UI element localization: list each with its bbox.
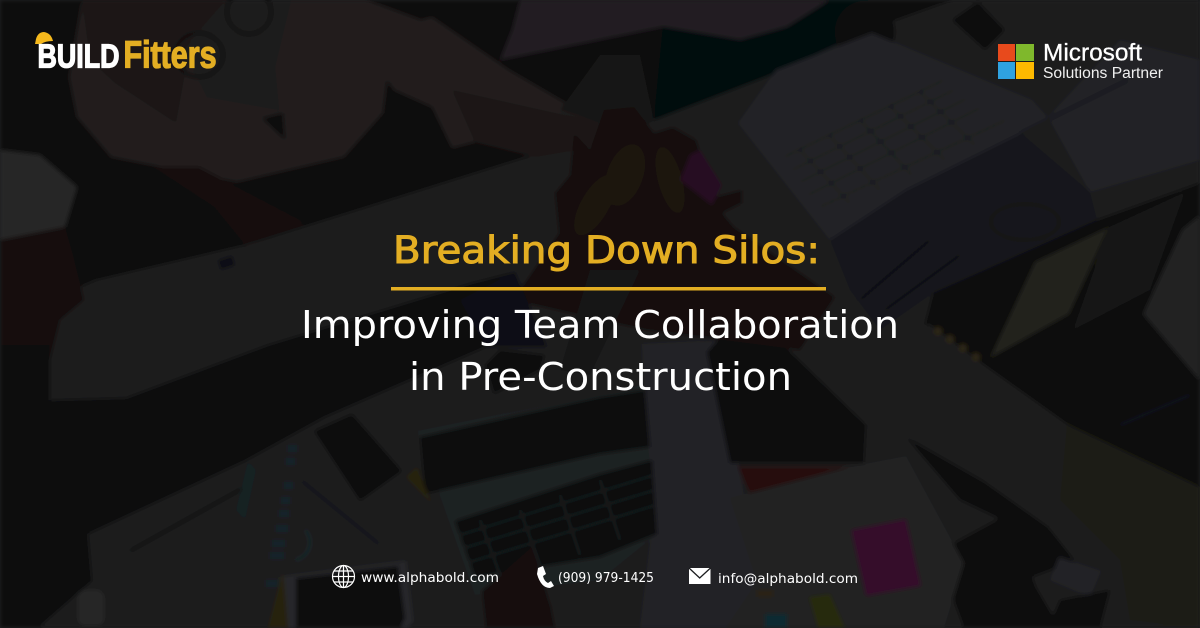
icon: phone [537, 566, 554, 588]
man hair [0, 150, 77, 240]
sleeve buttons [934, 327, 980, 361]
laptop black [925, 183, 1200, 487]
logo word Fitters: Fitters [124, 34, 216, 76]
logo: BuildFitters [35, 32, 216, 76]
bottom phone [279, 561, 413, 628]
phone number: (909) 979-1425 [558, 570, 654, 586]
woman forearm [452, 90, 600, 157]
dark shadow zone under paper [830, 133, 1097, 330]
watch [78, 590, 104, 626]
laptop [417, 385, 657, 595]
pink note [851, 519, 921, 596]
pen and right paper [1048, 40, 1200, 192]
woman shirt [69, 0, 600, 182]
heading: Breaking Down Silos: [393, 228, 820, 272]
desk pens [860, 240, 930, 300]
hands stack [513, 107, 835, 350]
paper seam [245, 245, 262, 320]
tablet [707, 310, 866, 463]
title block [301, 228, 899, 400]
glasses [227, 0, 271, 34]
second person shirt [500, 0, 830, 60]
pink note top [680, 150, 722, 205]
sheet [726, 456, 964, 628]
blue arm [0, 272, 547, 628]
logo: Microsoft Solutions Partner [998, 40, 1163, 82]
keyboard strip over arm [560, 270, 640, 375]
contact bar [332, 566, 858, 588]
chart ruler [266, 445, 297, 587]
collar shadow [262, 113, 285, 140]
phone mid [314, 414, 402, 501]
hand on laptop [482, 547, 555, 628]
woman face [184, 0, 291, 110]
phone strip [906, 437, 1075, 577]
fist top [835, 1, 895, 63]
website: www.alphabold.com [361, 570, 499, 586]
yellow tab [406, 467, 432, 504]
subtitle line 1: Improving Team Collaboration [301, 303, 899, 348]
man face [0, 227, 84, 402]
heading rule [391, 287, 826, 290]
icon: Microsoft squares [998, 44, 1034, 79]
red notebook [738, 467, 849, 500]
dark floor behind the table [0, 0, 952, 300]
pen on chart [302, 481, 379, 544]
gridded paper [738, 33, 1050, 240]
logo word BUILD: BUILD [38, 38, 120, 74]
small phone by laptop [485, 350, 545, 394]
Microsoft wordmark: Microsoft [1043, 40, 1142, 66]
woman lower arm [153, 167, 306, 245]
icon: globe [332, 566, 354, 588]
hand lower right [940, 517, 1060, 628]
woman hair [82, 0, 226, 123]
yellow note [809, 594, 845, 628]
subtitle line 2: in Pre-Construction [409, 355, 792, 400]
icon: hard hat [35, 32, 53, 44]
icon: mail [689, 568, 710, 584]
email: info@alphabold.com [718, 571, 858, 587]
Solutions Partner: Solutions Partner [1043, 65, 1163, 82]
phone top [952, 2, 1005, 50]
suit sleeve [853, 324, 1200, 628]
center sleeve/white paper [640, 340, 757, 628]
white cuff [1050, 557, 1101, 597]
